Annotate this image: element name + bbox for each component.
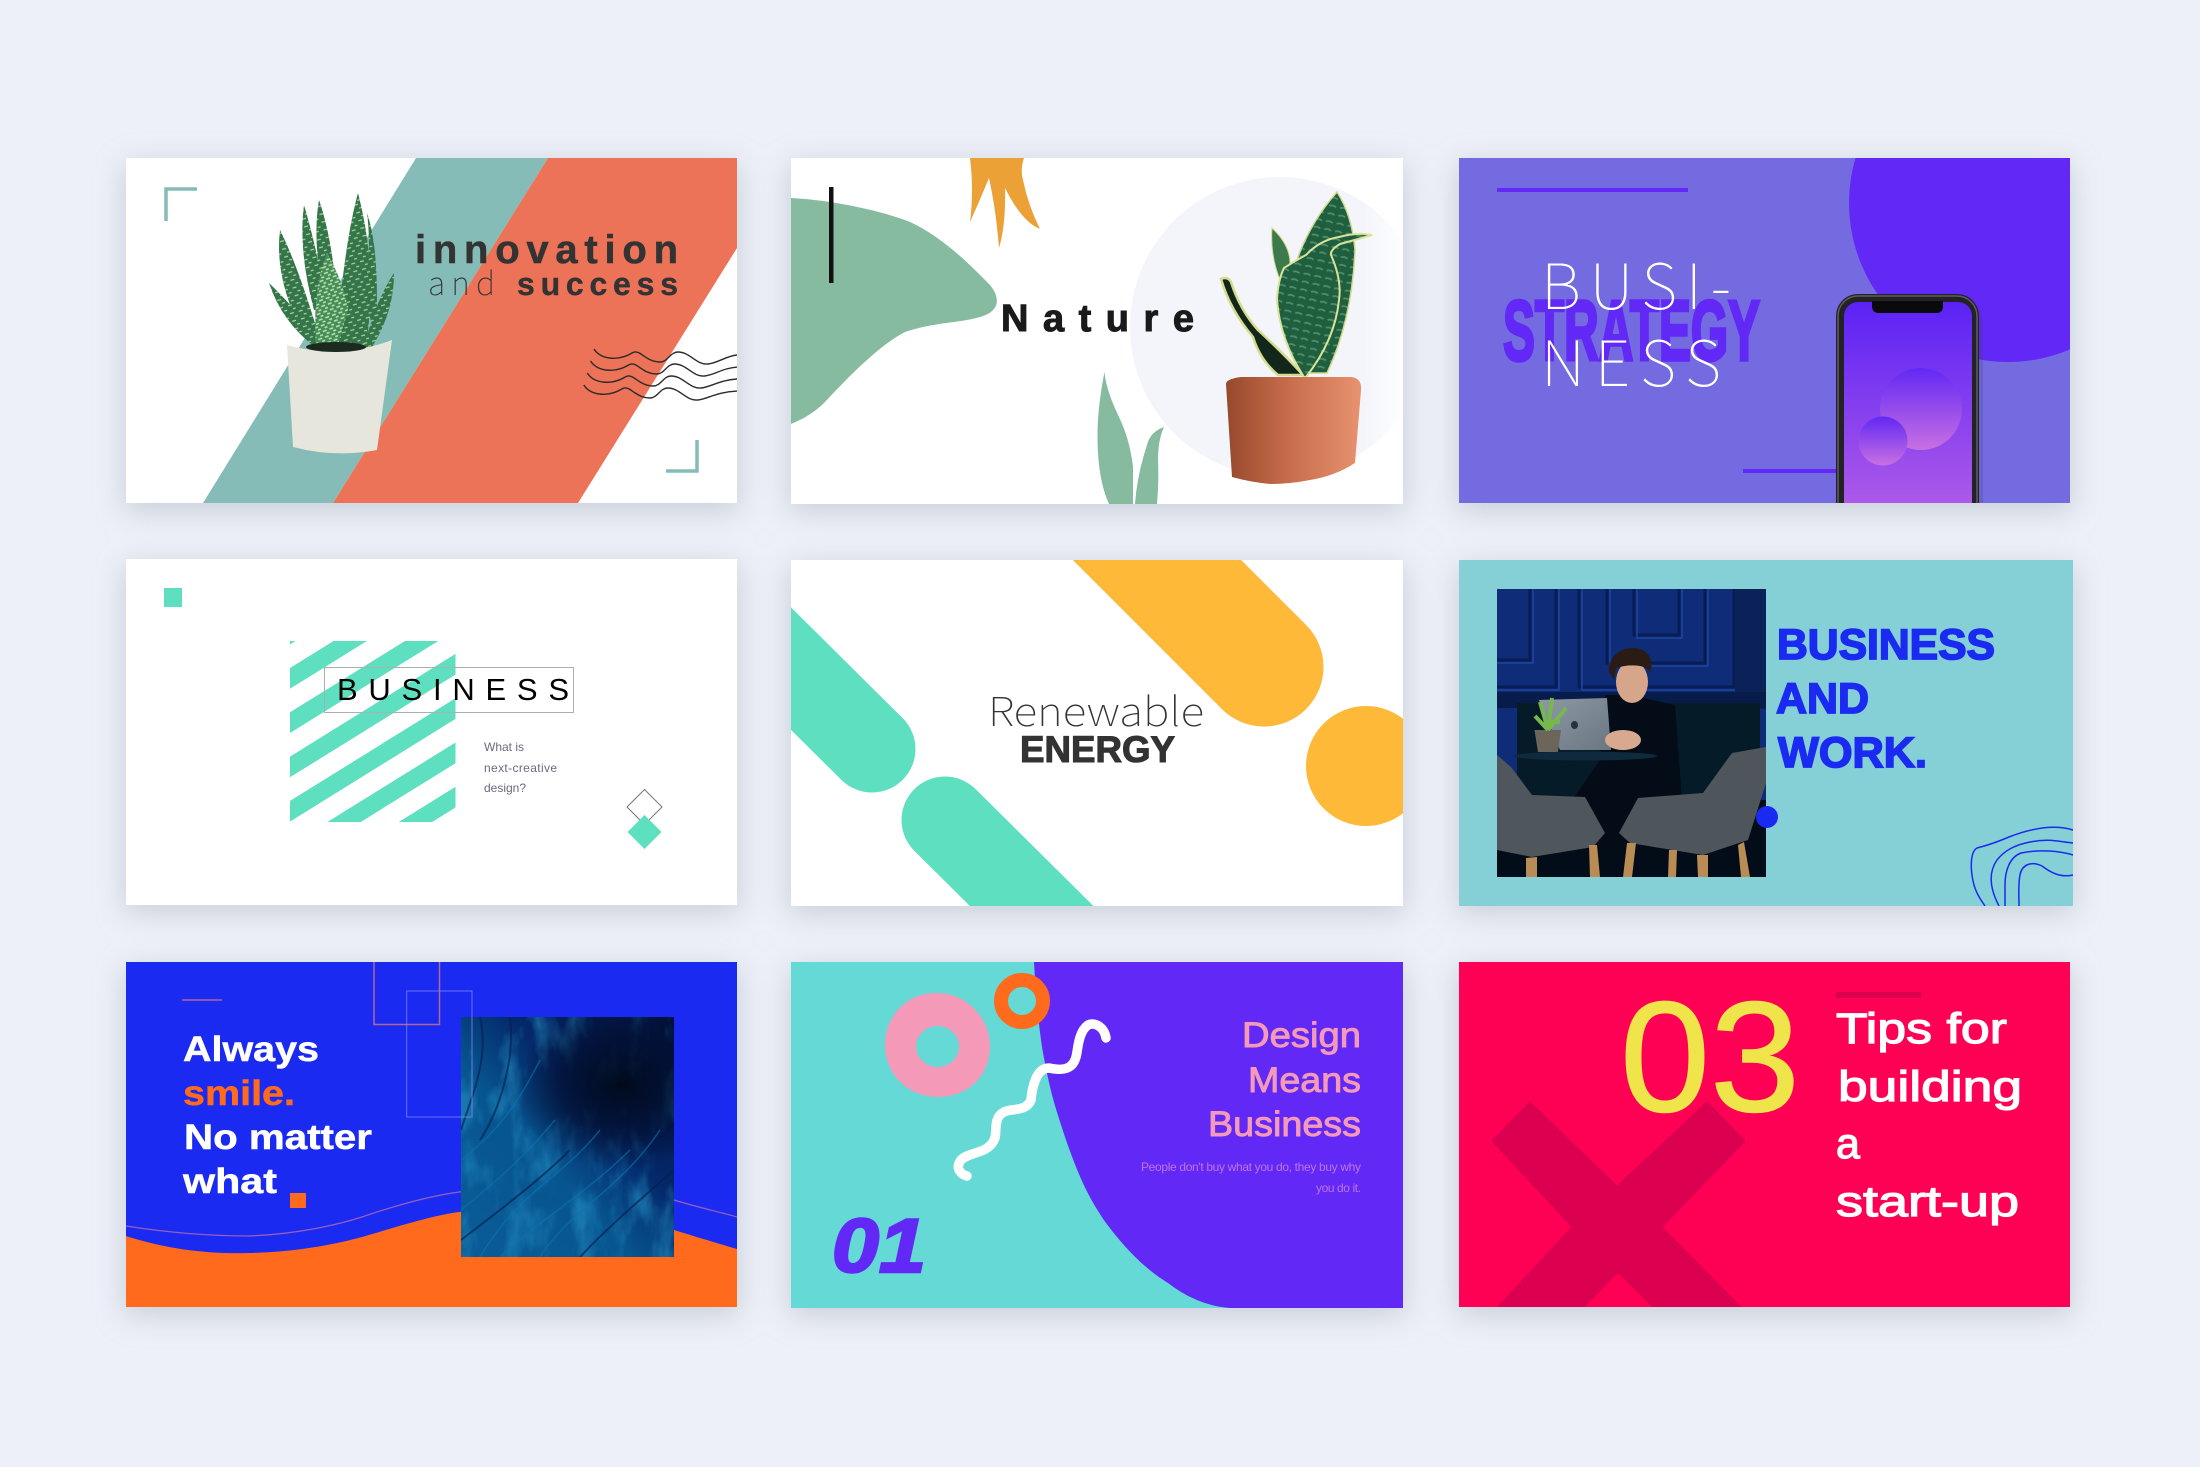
outlined title box bbox=[324, 668, 574, 712]
panel: business and work slide bbox=[1459, 560, 2073, 906]
heading: business and work: WORK. bbox=[1778, 729, 1927, 777]
heading: and success: and bbox=[428, 259, 495, 305]
icon: orange ring bbox=[1001, 980, 1043, 1022]
number 03: 03 bbox=[1620, 970, 1800, 1145]
small teal square bbox=[164, 588, 182, 607]
panel: design means business slide bbox=[791, 962, 1403, 1308]
panel: renewable energy slide bbox=[791, 560, 1403, 906]
heading: Nature: Nature bbox=[1001, 298, 1194, 340]
panel: innovation and success slide bbox=[126, 158, 738, 503]
heading: BUSINESS: BUSINESS bbox=[337, 672, 569, 707]
blue dot bbox=[1756, 806, 1778, 828]
text block: people buy why bbox=[1141, 1160, 1361, 1195]
accent bar bbox=[1836, 992, 1921, 998]
teal rounded band left bbox=[740, 618, 872, 749]
text block: people buy why: you do it. bbox=[1316, 1181, 1361, 1195]
heading: BUSI-: BUSI- bbox=[1541, 237, 1731, 328]
orange wave bbox=[126, 1207, 737, 1307]
heading: design means business: Means bbox=[1248, 1061, 1361, 1100]
teal rounded band bottom bbox=[945, 820, 1072, 946]
photo: blue marble texture bbox=[461, 1000, 725, 1257]
heading: tips for building a start-up: a bbox=[1836, 1120, 1860, 1168]
icon: wavy lines bbox=[584, 349, 738, 400]
heading: Renewable: Renewable bbox=[988, 680, 1204, 738]
heading: tips for building a start-up bbox=[1836, 1005, 2022, 1226]
heading: always smile no matter what: smile. bbox=[183, 1074, 295, 1113]
outlined rectangle top bbox=[374, 955, 440, 1024]
heading: tips for building a start-up: start-up bbox=[1836, 1178, 2019, 1226]
icon: pink donut bbox=[885, 993, 990, 1097]
icon: outlined diamond bbox=[627, 790, 662, 824]
orange square bbox=[290, 1193, 306, 1208]
panel: tips for building a start-up slide bbox=[1459, 962, 2070, 1310]
text block: what is next-creative design: design? bbox=[484, 781, 526, 795]
purple circle bbox=[1849, 158, 2070, 362]
corner bracket top-left bbox=[166, 189, 197, 221]
heading: tips for building a start-up: Tips for bbox=[1836, 1005, 2007, 1053]
black vertical bar bbox=[829, 187, 834, 283]
heading: always smile no matter what bbox=[182, 1030, 372, 1201]
text block: what is next-creative design: next-creative bbox=[484, 761, 557, 775]
icon: aloe plant in concrete pot bbox=[269, 193, 394, 453]
text block: what is next-creative design: What is bbox=[484, 740, 524, 754]
yellow circle bbox=[1306, 706, 1403, 826]
heading: and success: success bbox=[517, 266, 678, 302]
heading: STRATEGY: STRATEGY bbox=[1503, 284, 1760, 379]
orange flower shape bbox=[970, 158, 1040, 248]
panel: business striped slide bbox=[126, 559, 737, 905]
panel: nature slide bbox=[791, 158, 1430, 504]
panel: always smile slide bbox=[126, 955, 737, 1307]
yellow rounded band bbox=[1102, 505, 1264, 667]
top accent line bbox=[1497, 188, 1688, 192]
outlined rectangle over photo bbox=[407, 991, 472, 1117]
icon: snake plant in terracotta pot bbox=[1221, 192, 1372, 484]
heading: design means business: Design bbox=[1242, 1016, 1361, 1055]
large X shape bbox=[1494, 1104, 1743, 1310]
green organic blob bbox=[791, 198, 997, 424]
icon: contour lines bbox=[1971, 827, 2073, 906]
text block: people buy why: People don't buy what you do, they buy why bbox=[1141, 1160, 1361, 1174]
photo: man with laptop in blue room bbox=[1490, 580, 1766, 877]
icon: filled diamond bbox=[628, 815, 662, 849]
heading: always smile no matter what: what bbox=[182, 1162, 277, 1201]
heading: design means business bbox=[1208, 1016, 1361, 1144]
heading: ENERGY: ENERGY bbox=[1020, 729, 1175, 770]
heading: business and work bbox=[1776, 621, 1995, 777]
panel: business strategy purple slide bbox=[1459, 158, 2070, 503]
coral diagonal band bbox=[333, 158, 737, 503]
heading: business and work: BUSINESS bbox=[1777, 621, 1995, 669]
accent dash bbox=[182, 999, 222, 1001]
heading: NESS: NESS bbox=[1541, 314, 1721, 405]
heading: always smile no matter what: No matter bbox=[184, 1118, 372, 1157]
heading: innovation: innovation bbox=[415, 228, 678, 272]
text block: what is next-creative design bbox=[484, 740, 557, 795]
light circle behind plant bbox=[1130, 177, 1378, 469]
purple curved area bbox=[1034, 962, 1403, 1308]
icon: white squiggle bbox=[958, 1024, 1106, 1176]
heading: always smile no matter what: Always bbox=[183, 1030, 319, 1069]
heading: design means business: Business bbox=[1208, 1105, 1361, 1144]
green leaves at bottom bbox=[1097, 372, 1164, 504]
striped teal square bbox=[290, 641, 456, 822]
heading: tips for building a start-up: building bbox=[1838, 1063, 2022, 1111]
heading: business and work: AND bbox=[1776, 675, 1869, 723]
number 01: 01 bbox=[832, 1204, 926, 1289]
corner bracket bottom-right bbox=[666, 440, 697, 471]
teal diagonal band bbox=[203, 158, 548, 503]
icon: smartphone mockup bbox=[1836, 294, 1983, 503]
thin wave line bbox=[126, 1184, 737, 1236]
bottom accent line bbox=[1743, 469, 1838, 473]
